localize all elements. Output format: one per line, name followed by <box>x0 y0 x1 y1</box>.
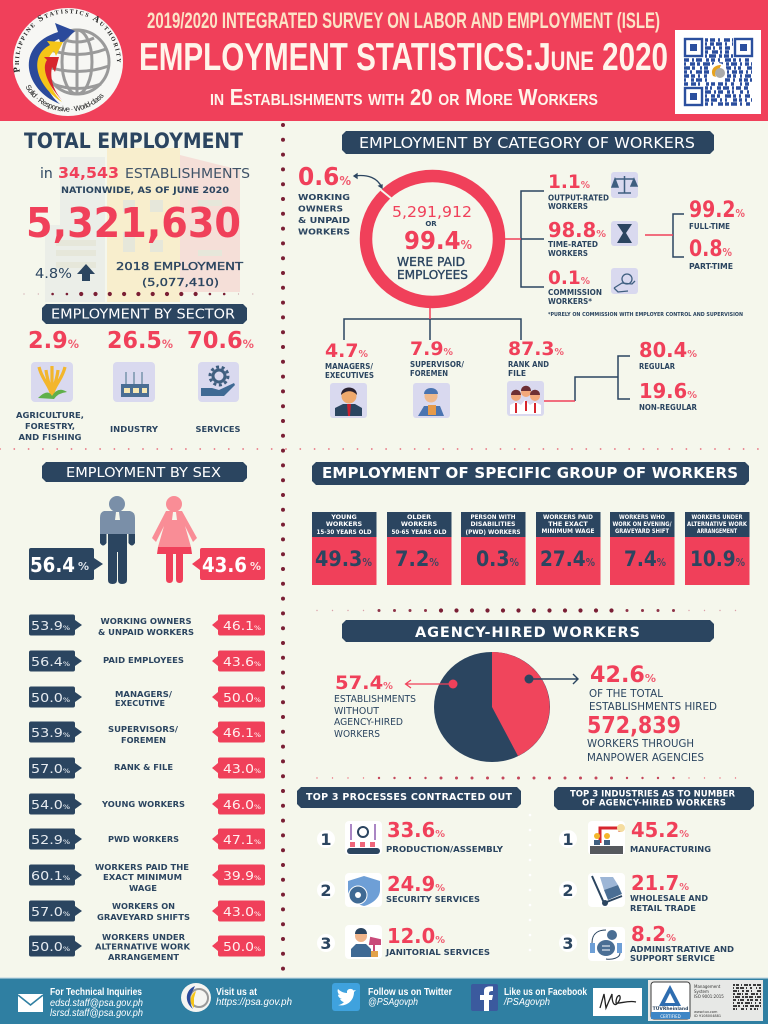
footer: technical inquiries: lsrsd.staff@psa.gov.ph <box>50 1008 143 1019</box>
certification badge: www.tuv.com <box>694 1010 718 1014</box>
ring chart: paid employees: WERE PAID <box>397 255 465 269</box>
stat: non-regular: NON-REGULAR <box>639 403 697 412</box>
growth rate with up arrow <box>35 264 95 282</box>
ring chart: paid employees: OR <box>425 220 437 228</box>
logo: Philippine Statistics Authority: Solid · Responsive · World-class <box>26 84 104 112</box>
stat: time-rated <box>548 218 638 258</box>
stat: no agency-hired: WORKERS <box>334 729 380 740</box>
stat: rank and file: FILE <box>508 369 526 378</box>
card: alternative arrangement: WORKERS UNDER <box>692 513 743 521</box>
stat: supervisors: FOREMEN <box>410 369 448 378</box>
row: graveyard shifts: 43.0 % <box>223 905 261 919</box>
stat: part-time: PART-TIME <box>689 262 733 271</box>
row: working owners <box>29 614 265 637</box>
footer: website: https://psa.gov.ph <box>216 997 292 1008</box>
establishments line <box>40 164 250 182</box>
item: wholesale and retail <box>559 871 708 913</box>
row: supervisors: 46.1 % <box>223 726 261 740</box>
row: working owners: 53.9 % <box>31 619 70 633</box>
stat: no agency-hired: 57.4% <box>335 672 393 694</box>
stat: industry <box>107 328 173 434</box>
item: wholesale and retail: 21.7% <box>631 871 689 895</box>
icon: man figure <box>100 496 135 584</box>
certification badge: ISO 9001:2015 <box>694 994 724 999</box>
stat: output-rated: 1.1% <box>548 171 590 193</box>
row: supervisors: 53.9 % <box>31 726 70 740</box>
stat: with agency-hired <box>587 663 717 764</box>
row: graveyard shifts: GRAVEYARD SHIFTS <box>97 913 190 922</box>
panel: agency-hired workers <box>334 620 717 764</box>
stat: regular: REGULAR <box>639 362 675 371</box>
stat: no agency-hired: ESTABLISHMENTS <box>334 694 416 705</box>
signature <box>593 988 642 1016</box>
stat: output-rated: OUTPUT-RATED <box>548 194 609 202</box>
row: PWD workers: 47.1 % <box>223 833 261 847</box>
item: security: SECURITY SERVICES <box>386 895 480 904</box>
card: older workers: OLDER <box>407 513 431 521</box>
card: graveyard shift: GRAVEYARD SHIFT <box>615 527 670 535</box>
card: minimum wage: 27.4% <box>540 547 595 571</box>
stat: managers: EXECUTIVES <box>325 371 374 380</box>
stat: with agency-hired: MANPOWER AGENCIES <box>587 752 704 764</box>
card: alternative arrangement: ARRANGEMENT <box>697 527 737 535</box>
stat: commission <box>548 267 638 306</box>
item: janitorial <box>317 924 490 959</box>
card: minimum wage: THE EXACT <box>548 520 588 528</box>
card: minimum wage: MINIMUM WAGE <box>542 527 594 535</box>
stat: with agency-hired: ESTABLISHMENTS HIRED <box>589 701 717 713</box>
item: wholesale and retail: WHOLESALE AND <box>630 894 708 903</box>
footer: twitter: Follow us on Twitter <box>368 987 452 998</box>
panel: specific groups of workers <box>312 462 750 585</box>
item: production <box>317 818 503 855</box>
row: PWD workers: 52.9 % <box>31 833 70 847</box>
footer: technical inquiries <box>18 987 143 1019</box>
logo: Philippine Statistics Authority <box>13 8 123 116</box>
card: graveyard shift: WORK ON EVENING/ <box>612 520 672 528</box>
stat: agriculture: 2.9% <box>28 328 79 354</box>
banner: top industries <box>554 787 754 810</box>
nationwide note: NATIONWIDE, AS OF JUNE 2020 <box>61 186 229 196</box>
footer band <box>0 977 768 1024</box>
stat: no agency-hired: WITHOUT <box>334 706 379 717</box>
row: alternative arrangement: ALTERNATIVE WORK <box>95 942 191 952</box>
card: graveyard shift: 7.4% <box>624 547 666 571</box>
stat: agriculture: AGRICULTURE, <box>16 411 84 420</box>
stat: agriculture: AND FISHING <box>18 433 82 442</box>
item: production: PRODUCTION/ASSEMBLY <box>386 845 503 854</box>
item: administrative support: SUPPORT SERVICE <box>630 954 715 963</box>
stat: rank and file <box>507 338 564 416</box>
row: paid employees: 56.4 % <box>31 655 70 669</box>
row: rank and file: RANK & FILE <box>114 763 173 772</box>
arrow: curved pointer to ring <box>354 174 382 188</box>
arrow: to 57.4% <box>406 680 458 688</box>
callout: male share: % <box>78 560 89 573</box>
row: supervisors <box>29 722 265 745</box>
item: production: 1 <box>320 830 332 849</box>
card: older workers <box>387 512 452 585</box>
item: security: 24.9% <box>387 872 445 896</box>
card: young workers: WORKERS <box>326 520 363 528</box>
banner: by sex: EMPLOYMENT BY SEX <box>66 466 221 481</box>
row: PWD workers <box>29 828 265 850</box>
card: alternative arrangement: ALTERNATIVE WORK <box>687 520 748 528</box>
footer: website: Visit us at <box>216 987 258 998</box>
row: working owners: & UNPAID WORKERS <box>98 628 194 637</box>
panel: employment by sector <box>16 304 254 442</box>
card: alternative arrangement <box>685 512 750 585</box>
callout: female share <box>192 548 265 580</box>
row: graveyard shifts: 57.0 % <box>31 905 70 919</box>
row: managers: EXECUTIVE <box>115 699 165 708</box>
stat: working owners: OWNERS <box>298 204 343 214</box>
item: janitorial: 12.0% <box>387 924 445 948</box>
stat: services <box>187 328 254 434</box>
certification badge: ID 9108004881 <box>694 1014 721 1018</box>
header band <box>0 0 768 121</box>
stat: services: SERVICES <box>196 425 241 434</box>
stat: full-time: FULL-TIME <box>689 222 730 231</box>
row: young workers <box>29 794 265 814</box>
pie chart <box>434 652 550 762</box>
stat: managers: 4.7% <box>325 340 368 362</box>
row: managers: MANAGERS/ <box>115 690 172 699</box>
total employment background buildings <box>45 148 240 302</box>
stat: with agency-hired: 42.6% <box>590 663 656 688</box>
banner: top processes: TOP 3 PROCESSES CONTRACTED OUT <box>306 792 513 803</box>
item: manufacturing: 45.2% <box>631 818 689 842</box>
footer: twitter <box>332 983 452 1011</box>
footer: twitter: @PSAgovph <box>368 997 418 1008</box>
card: older workers: 7.2% <box>395 547 439 571</box>
row: minimum wage: 39.9 % <box>223 869 261 883</box>
row: alternative arrangement <box>29 933 265 962</box>
row: paid employees: PAID EMPLOYEES <box>103 656 184 665</box>
arrow: to 42.6% <box>524 674 578 684</box>
item: production: 33.6% <box>387 818 445 842</box>
stat: commission: 0.1% <box>548 267 590 289</box>
stat: time-rated: WORKERS <box>548 249 588 258</box>
icon: woman figure <box>152 496 197 583</box>
banner: employment by sector: EMPLOYMENT BY SECTOR <box>51 308 235 322</box>
establishments line: in <box>40 166 53 182</box>
stat: commission: COMMISSION <box>548 288 602 297</box>
callout: female share: % <box>250 560 261 573</box>
item: wholesale and retail: 2 <box>562 881 574 900</box>
row: rank and file: 43.0 % <box>223 762 261 776</box>
stat: services: 70.6% <box>187 328 254 354</box>
panel: employment by category of workers <box>298 131 745 418</box>
ring chart: paid employees: 99.4% <box>404 226 472 255</box>
callout: male share <box>29 548 103 580</box>
item: security <box>317 872 480 907</box>
card: PWD: 0.3% <box>476 547 519 571</box>
banner: by sex <box>42 462 247 482</box>
item: administrative support: ADMINISTRATIVE AND <box>630 945 734 954</box>
logo: Philippine Statistics Authority: Philippine Statistics Authority <box>14 9 121 73</box>
item: administrative support <box>559 922 734 963</box>
row: graveyard shifts: WORKERS ON <box>112 902 175 911</box>
stat: no agency-hired <box>334 672 416 740</box>
stat: working owners: & UNPAID <box>298 216 350 225</box>
total employment number: 5,321,630 <box>26 199 241 247</box>
banner: category: EMPLOYMENT BY CATEGORY OF WORKERS <box>359 134 695 152</box>
row: minimum wage: 60.1 % <box>31 869 70 883</box>
card: young workers: YOUNG <box>330 513 357 521</box>
2018 employment <box>116 260 243 289</box>
growth rate with up arrow: 4.8% <box>35 266 72 282</box>
card: older workers: WORKERS <box>401 520 438 528</box>
card: alternative arrangement: 10.9% <box>690 547 745 571</box>
stat: time-rated: TIME-RATED <box>548 240 598 249</box>
card: PWD <box>461 512 526 585</box>
item: janitorial: JANITORIAL SERVICES <box>385 948 490 957</box>
row: young workers: YOUNG WORKERS <box>101 800 185 809</box>
row: alternative arrangement: 50.0 % <box>31 940 70 954</box>
item: manufacturing: 1 <box>562 830 574 849</box>
row: minimum wage <box>29 863 265 893</box>
footer: facebook: Like us on Facebook <box>504 987 587 998</box>
row: young workers: 46.0 % <box>223 798 261 812</box>
footer: facebook: /PSAgovph <box>503 997 550 1008</box>
stat: agriculture: FORESTRY, <box>25 422 75 431</box>
row: managers <box>29 686 265 708</box>
QR code <box>675 30 761 114</box>
card: minimum wage <box>536 512 600 585</box>
panel: employment by sex <box>29 462 265 962</box>
card: young workers <box>312 512 376 585</box>
row: supervisors: FOREMEN <box>121 736 166 745</box>
row: alternative arrangement: WORKERS UNDER <box>102 933 185 942</box>
row: paid employees: 43.6 % <box>223 655 261 669</box>
item: manufacturing: MANUFACTURING <box>630 845 711 854</box>
stat: output-rated: WORKERS <box>548 202 588 211</box>
establishments line: ESTABLISHMENTS <box>125 166 250 182</box>
banner: category <box>342 131 714 154</box>
card: graveyard shift: WORKERS WHO <box>619 513 665 521</box>
stat: rank and file: 87.3% <box>508 338 564 360</box>
ring chart: paid employees: 5,291,912 <box>392 203 472 221</box>
callout: female share: 43.6 <box>202 553 247 577</box>
row: supervisors: SUPERVISORS/ <box>108 725 178 734</box>
footer: facebook <box>471 984 587 1011</box>
subtitle: in Establishments with 20 or More Workers <box>210 84 598 110</box>
item: administrative support: 8.2% <box>631 922 676 946</box>
row: working owners: 46.1 % <box>223 619 261 633</box>
card: PWD: PERSON WITH <box>470 513 516 521</box>
stat: time-rated: 98.8% <box>548 218 606 242</box>
2018 employment: 2018 EMPLOYMENT <box>116 260 243 273</box>
stat: part-time: 0.8% <box>689 237 732 262</box>
banner: agency-hired <box>342 620 714 642</box>
stat: supervisors <box>410 338 464 418</box>
card: PWD: DISABILITIES <box>470 520 516 528</box>
certification badge: TÜVRheinland <box>653 1005 688 1012</box>
heading: total employment: TOTAL EMPLOYMENT <box>24 129 244 153</box>
card: graveyard shift <box>610 512 674 585</box>
row: paid employees <box>29 650 265 672</box>
row: alternative arrangement: ARRANGEMENT <box>108 953 180 962</box>
row: graveyard shifts <box>29 900 265 922</box>
stat: working owners: WORKING <box>298 193 350 202</box>
row: rank and file: 57.0 % <box>31 762 70 776</box>
stat: supervisors: SUPERVISOR/ <box>410 360 464 369</box>
banner: specific groups: EMPLOYMENT OF SPECIFIC GROUP OF WORKERS <box>322 464 738 482</box>
footnote: *PURELY ON COMMISSION WITH EMPLOYER CONTROL AND SUPERVISION <box>548 312 743 318</box>
row: young workers: 54.0 % <box>31 798 70 812</box>
row: working owners: WORKING OWNERS <box>100 617 192 626</box>
card: minimum wage: WORKERS PAID <box>543 513 593 521</box>
stat: no agency-hired: AGENCY-HIRED <box>334 717 403 728</box>
callout: male share: 56.4 <box>30 553 75 577</box>
stat: managers: MANAGERS/ <box>325 362 373 371</box>
card: older workers: 50-65 YEARS OLD <box>392 528 446 536</box>
banner: top industries: TOP 3 INDUSTRIES AS TO NUMBER <box>570 790 735 800</box>
item: wholesale and retail: RETAIL TRADE <box>630 904 696 913</box>
2018 employment: (5,077,410) <box>142 276 219 289</box>
row: minimum wage: WORKERS PAID THE <box>95 863 189 872</box>
footer: technical inquiries: edsd.staff@psa.gov.ph <box>50 998 143 1009</box>
certification badge <box>648 980 763 1021</box>
banner: top industries: OF AGENCY-HIRED WORKERS <box>582 798 726 808</box>
stat: full-time: 99.2% <box>689 198 745 223</box>
stat: working owners: WORKERS <box>298 228 350 236</box>
item: manufacturing <box>559 818 711 855</box>
card: PWD: (PWD) WORKERS <box>466 528 521 536</box>
stat: with agency-hired: WORKERS THROUGH <box>587 738 694 750</box>
stat: with agency-hired: OF THE TOTAL <box>589 688 663 700</box>
ring chart: paid employees <box>366 176 499 302</box>
stat: regular: 80.4% <box>639 338 697 362</box>
row: minimum wage: EXACT MINIMUM <box>103 873 182 882</box>
establishments line: 34,543 <box>58 164 119 182</box>
certification badge: Management <box>694 984 721 989</box>
card: young workers: 49.3% <box>315 547 372 571</box>
certification badge: CERTIFIED <box>660 1014 681 1019</box>
stat: working owners: 0.6% <box>298 162 351 191</box>
panel: top 3 industries <box>554 787 754 963</box>
row: rank and file <box>29 758 265 778</box>
banner: top processes <box>297 787 521 808</box>
stat: rank and file: RANK AND <box>508 360 549 369</box>
stat: output-rated <box>548 171 638 211</box>
stat: industry: 26.5% <box>107 328 173 354</box>
stat: non-regular: 19.6% <box>639 379 697 403</box>
row: managers: 50.0 % <box>31 691 70 705</box>
stat: with agency-hired: 572,839 <box>587 713 681 739</box>
banner: agency-hired: AGENCY-HIRED WORKERS <box>415 625 640 641</box>
item: security: 2 <box>320 881 332 900</box>
stat: industry: INDUSTRY <box>110 425 158 434</box>
item: janitorial: 3 <box>320 934 332 953</box>
stat: working owners <box>298 162 351 236</box>
stat: commission: WORKERS* <box>548 297 593 306</box>
footer: website <box>181 983 292 1012</box>
row: minimum wage: WAGE <box>129 884 157 893</box>
row: PWD workers: PWD WORKERS <box>108 835 179 844</box>
row: managers: 50.0 % <box>223 691 261 705</box>
stat: agriculture <box>16 328 84 442</box>
row: alternative arrangement: 50.0 % <box>223 940 261 954</box>
ring chart: paid employees: EMPLOYEES <box>397 268 468 282</box>
item: administrative support: 3 <box>562 934 574 953</box>
stat: supervisors: 7.9% <box>410 338 453 360</box>
card: young workers: 15-30 YEARS OLD <box>316 528 372 536</box>
footer: technical inquiries: For Technical Inquiries <box>50 987 142 998</box>
stat: managers <box>325 340 374 418</box>
panel: top 3 processes contracted out <box>297 787 521 959</box>
certification badge: System <box>694 989 709 994</box>
banner: employment by sector <box>42 304 247 324</box>
